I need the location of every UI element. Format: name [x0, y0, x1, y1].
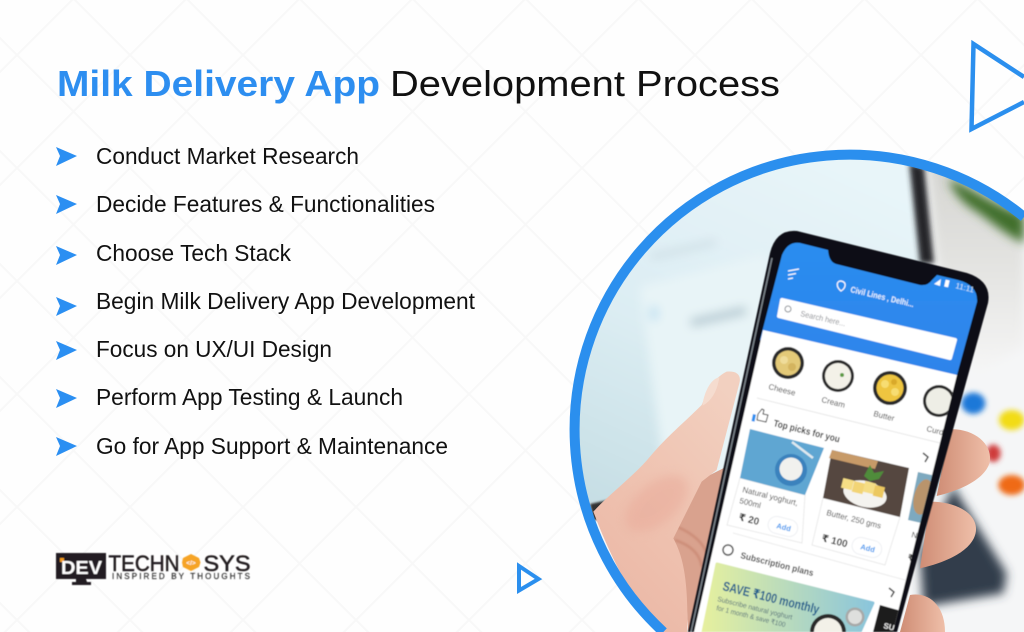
logo: Dev Technosys: DEV: [61, 558, 102, 578]
cream: Cream: [821, 395, 846, 410]
product card: natural yoghurt: Add: [776, 521, 792, 534]
logo: Dev Technosys: </>: [186, 560, 196, 567]
blurred desk background: [560, 140, 1024, 632]
title: Milk Delivery App: [57, 63, 380, 104]
curd: [923, 385, 955, 437]
product card: partial third: [908, 472, 933, 562]
process steps list: [56, 143, 476, 459]
subscription plans heading: [723, 545, 815, 578]
product card: butter: Butter, 250 gms: [826, 508, 882, 530]
logo: Dev Technosys: SYS: [204, 551, 250, 576]
product card: butter: ₹ 100: [820, 533, 849, 550]
cheese: Cheese: [768, 382, 797, 398]
carousel arrow: [923, 453, 928, 462]
screen body: [694, 330, 957, 632]
step 2: Decide Features & Functionalities: [96, 191, 435, 217]
cream: [821, 360, 854, 410]
header controls: [788, 269, 976, 309]
header controls: 11:11: [955, 281, 976, 295]
product card: natural yoghurt: ₹ 20: [737, 512, 761, 528]
product card: partial third: Na: [911, 530, 923, 542]
icon: small play triangle: [519, 566, 538, 590]
web of hand behind thumb: [672, 467, 727, 632]
subscription plans heading: Subscription plans: [740, 550, 815, 578]
photo circle ring: [575, 155, 1024, 632]
product card: natural yoghurt: 500ml: [739, 496, 762, 510]
photo panel: hand holding phone: [560, 140, 1024, 632]
product card: partial third: ₹: [907, 552, 915, 563]
butter: Butter: [873, 409, 896, 423]
product card: natural yoghurt: Natural yoghurt,: [742, 485, 799, 508]
next banner: [872, 587, 900, 632]
top picks heading: [752, 409, 841, 445]
butter: [873, 371, 907, 423]
subscription banner: for 1 month & save ₹100: [716, 604, 786, 629]
step 4: Begin Milk Delivery App Development: [96, 288, 476, 314]
product card: butter: Add: [860, 542, 876, 555]
step 7: Go for App Support & Maintenance: [96, 433, 448, 459]
header controls: Civil Lines , Delhi...: [850, 284, 915, 309]
subscription banner: Subscribe natural yoghurt: [717, 596, 793, 622]
subscription banner: SAVE ₹100 monthly: [721, 578, 822, 617]
screen header: [760, 243, 977, 375]
curd: Curd: [926, 424, 945, 437]
step 6: Perform App Testing & Launch: [96, 384, 403, 410]
phone: [688, 231, 989, 632]
cheese: [768, 347, 804, 398]
icon: large play triangle top right: [972, 44, 1024, 129]
phone body: [688, 231, 989, 632]
right-hand fingers: [900, 429, 990, 632]
search bar: Search here...: [800, 309, 846, 328]
logo: Dev Technosys: INSPIRED BY THOUGHTS: [112, 572, 250, 581]
logo: Dev Technosys: [56, 551, 250, 585]
left-hand palm and thumb: [593, 372, 740, 632]
subscription banner: [703, 564, 873, 632]
step 1: Conduct Market Research: [96, 143, 359, 169]
step 5: Focus on UX/UI Design: [96, 336, 332, 362]
product card: butter: [812, 450, 909, 565]
search bar: [779, 300, 955, 358]
product card: natural yoghurt: [727, 429, 824, 543]
title: Development Process: [390, 63, 780, 104]
step 3: Choose Tech Stack: [96, 240, 291, 266]
title: [57, 63, 780, 104]
category bowls: [703, 347, 955, 632]
logo: Dev Technosys: TECHN: [108, 551, 180, 576]
top picks heading: Top picks for you: [772, 418, 841, 445]
